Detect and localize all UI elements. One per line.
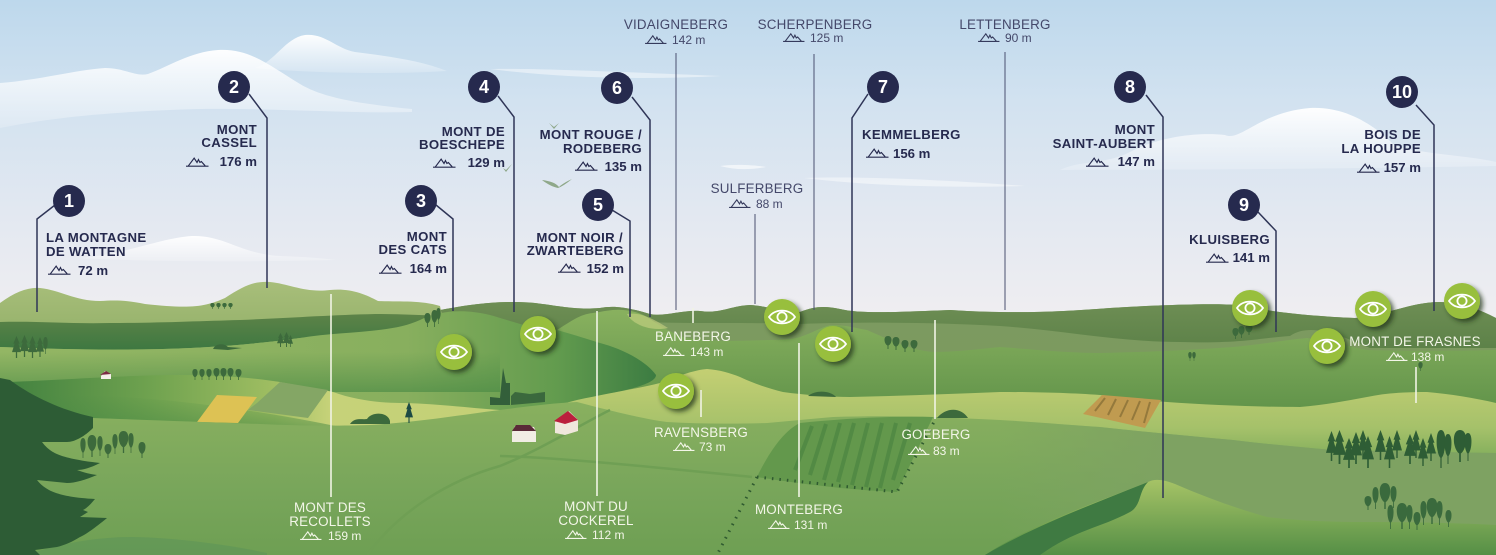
poplars right [1365, 483, 1452, 530]
foreground hill shadow [985, 482, 1148, 555]
bold labels [46, 122, 1421, 278]
bold labels: SAINT-AUBERT [1053, 136, 1155, 151]
mid ground right [557, 310, 1496, 425]
dark band right upper [430, 302, 1496, 350]
viewpoint eye icons [436, 283, 1480, 409]
thin dark labels: LETTENBERG [959, 17, 1051, 32]
leader lines [37, 52, 1434, 498]
thin white labels: 83 m [933, 444, 960, 458]
bold labels: 141 m [1233, 250, 1270, 265]
bold labels: 129 m [468, 155, 505, 170]
thin dark labels: VIDAIGNEBERG [624, 17, 728, 32]
bold labels: MONT [1115, 122, 1155, 137]
thin white labels: MONT DES [294, 500, 366, 515]
thin white labels: 131 m [794, 518, 827, 532]
pine foreground [0, 378, 107, 555]
hill shading [0, 352, 500, 392]
bold labels: MONT [217, 122, 257, 137]
main meadow [0, 402, 1496, 555]
number badges: 7 [878, 77, 888, 97]
thin white labels: 112 m [592, 528, 624, 542]
olive field [248, 382, 328, 418]
thin white labels: MONTEBERG [755, 502, 843, 517]
hill: Mont des Cats [0, 311, 656, 425]
strip shading [10, 395, 345, 432]
dark band left [0, 314, 440, 350]
number badges: 4 [479, 77, 489, 97]
bold labels: MONT [407, 229, 447, 244]
tree groups [12, 303, 1423, 458]
bold labels: 152 m [587, 261, 624, 276]
bold labels: LA HOUPPE [1341, 141, 1421, 156]
thin dark labels [624, 17, 1051, 211]
bold labels: 72 m [78, 263, 108, 278]
pale hilltop patch [627, 314, 668, 329]
duller right meadow [1000, 420, 1496, 555]
thin white labels: GOEBERG [901, 427, 971, 442]
bold labels: MONT DE [442, 124, 505, 139]
bold labels: MONT ROUGE / [540, 127, 642, 142]
bold labels: 156 m [893, 146, 930, 161]
thin dark labels: 90 m [1005, 31, 1032, 45]
sky background [0, 0, 1496, 340]
thin dark labels: 142 m [672, 33, 705, 47]
number badges: 6 [612, 78, 622, 98]
yellow field [197, 395, 257, 423]
lower left strip [10, 375, 500, 430]
bold labels: ZWARTEBERG [527, 243, 624, 258]
bold labels: KEMMELBERG [862, 127, 961, 142]
bold labels: BOESCHEPE [419, 137, 505, 152]
number badges [53, 71, 1418, 221]
church and village [490, 368, 545, 405]
number badges: 8 [1125, 77, 1135, 97]
birds [503, 123, 572, 188]
bold labels: LA MONTAGNE [46, 230, 147, 245]
foreground hill [985, 480, 1496, 555]
thin white labels: BANEBERG [655, 329, 731, 344]
number badges: 5 [593, 195, 603, 215]
number badges: 2 [229, 77, 239, 97]
ridge with Ravensberg [500, 369, 1496, 460]
bold labels: RODEBERG [563, 141, 642, 156]
bold labels: MONT NOIR / [536, 230, 623, 245]
pine forest right [1326, 430, 1471, 468]
bold labels: 157 m [1384, 160, 1421, 175]
bold labels: 164 m [410, 261, 447, 276]
thin white labels: 73 m [699, 440, 726, 454]
thin white labels: COCKEREL [558, 513, 634, 528]
thin dark labels: 88 m [756, 197, 783, 211]
thin white labels: 159 m [328, 529, 361, 543]
bold labels: 176 m [220, 154, 257, 169]
far hills left [0, 282, 450, 352]
far hills right [430, 302, 1496, 420]
bold labels: 147 m [1118, 154, 1155, 169]
number badges: 3 [416, 191, 426, 211]
shrubs [213, 344, 968, 424]
bold labels: BOIS DE [1364, 127, 1421, 142]
thin white labels [289, 329, 1481, 543]
bold labels: 135 m [605, 159, 642, 174]
thin white labels: 138 m [1411, 350, 1444, 364]
number badges: 10 [1392, 82, 1412, 102]
thin dark labels: 125 m [810, 31, 843, 45]
bold labels: DES CATS [378, 242, 447, 257]
bold labels: DE WATTEN [46, 244, 126, 259]
clouds [0, 35, 1496, 261]
dark pine [405, 402, 413, 423]
vineyard field [717, 417, 935, 555]
paths in meadow [367, 410, 752, 555]
thin white labels: 143 m [690, 345, 723, 359]
thin white labels: RECOLLETS [289, 514, 371, 529]
number badges: 1 [64, 191, 74, 211]
bold labels: KLUISBERG [1189, 232, 1270, 247]
thin white labels: MONT DU [564, 499, 628, 514]
thin white labels: MONT DE FRASNES [1349, 334, 1481, 349]
thin dark labels: SULFERBERG [711, 181, 803, 196]
houses [100, 371, 578, 442]
dark meadow patch [33, 537, 267, 555]
bold labels: CASSEL [201, 135, 257, 150]
brown field [1083, 395, 1161, 428]
thin white labels: RAVENSBERG [654, 425, 748, 440]
thin dark labels: SCHERPENBERG [758, 17, 872, 32]
number badges: 9 [1239, 195, 1249, 215]
